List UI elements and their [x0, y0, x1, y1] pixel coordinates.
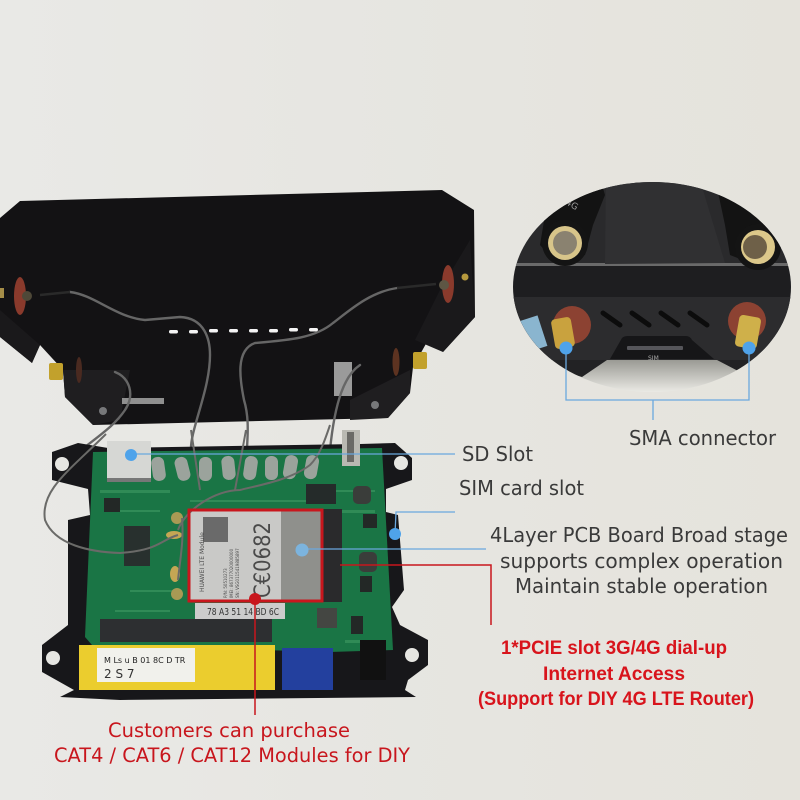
callout: PCIe slot	[340, 565, 491, 625]
inset: SMA connector close-up photo	[510, 178, 800, 395]
label: SD Slot: SD Slot	[462, 442, 533, 466]
callout: PCB board	[296, 544, 486, 556]
lid cutouts	[122, 398, 164, 404]
inset: SMA connector close-up photo: SIM	[648, 355, 659, 362]
vent slots	[169, 328, 318, 334]
vents	[603, 313, 707, 325]
infographic canvas	[0, 182, 791, 764]
router base enclosure: 78 A3 51 14 BD 6C	[207, 607, 279, 618]
callout: SMA connector bracket	[560, 342, 756, 420]
text block: PCIe description: Internet Access	[543, 664, 685, 685]
text block: PCB description: supports complex operation	[500, 549, 783, 573]
LTE module: SN: VSG0115419885897	[235, 548, 240, 598]
text block: PCIe description: 1*PCIE slot 3G/4G dial-up	[501, 638, 727, 659]
antenna cables	[70, 288, 397, 450]
antenna terminals	[166, 512, 183, 600]
text block: PCIe description	[478, 638, 754, 710]
capacitor row	[150, 454, 320, 482]
callout: module DIY	[249, 593, 261, 715]
green circuit board	[85, 448, 393, 652]
label: SMA connector: SMA connector	[629, 426, 777, 450]
text block: customers DIY note	[54, 719, 410, 767]
LTE module: C€0682	[251, 522, 276, 598]
LTE module: P/N: 50510273	[223, 568, 228, 598]
text block: PCB description: Maintain stable operation	[515, 574, 768, 598]
text block: PCIe description: (Support for DIY 4G LTE Router)	[478, 689, 754, 710]
yellow port block	[79, 645, 275, 690]
text block: customers DIY note: Customers can purchase	[108, 719, 350, 742]
antenna bases	[540, 188, 781, 270]
LTE module: HUAWEI LTE Module	[199, 532, 206, 592]
yellow port block: M Ls u B 01 8C D TR	[104, 656, 186, 665]
callout: SIM card slot	[389, 512, 455, 540]
text block: PCB description: 4Layer PCB Board Broad stage	[490, 523, 788, 547]
USB connector	[342, 430, 360, 466]
power jack	[360, 640, 386, 680]
antenna connectors on lid	[14, 277, 26, 315]
router lid with antenna cables	[0, 190, 475, 450]
QR code	[203, 517, 228, 542]
label: SIM card slot: SIM card slot	[459, 476, 584, 500]
blue port block	[282, 648, 333, 690]
callout: SD slot	[125, 449, 455, 461]
ICs and inductors	[124, 526, 150, 566]
LTE module: IMEI: 867377020000000	[229, 548, 234, 598]
module MAC label	[195, 603, 285, 619]
board cables	[44, 425, 330, 580]
text block: customers DIY note: CAT4 / CAT6 / CAT12 Modules for DIY	[54, 744, 410, 767]
red highlight box on module	[189, 510, 322, 601]
SD slot	[107, 441, 151, 482]
yellow port block: 2 S 7	[104, 667, 135, 681]
LTE module	[188, 509, 323, 602]
SMA jacks	[551, 302, 766, 350]
router base enclosure	[42, 425, 428, 700]
PCIe slot	[100, 619, 272, 642]
blue sticker	[520, 315, 548, 348]
text block: PCB description	[490, 523, 788, 598]
antenna bases: 4G	[564, 198, 580, 213]
SIM slot bay	[610, 336, 714, 359]
